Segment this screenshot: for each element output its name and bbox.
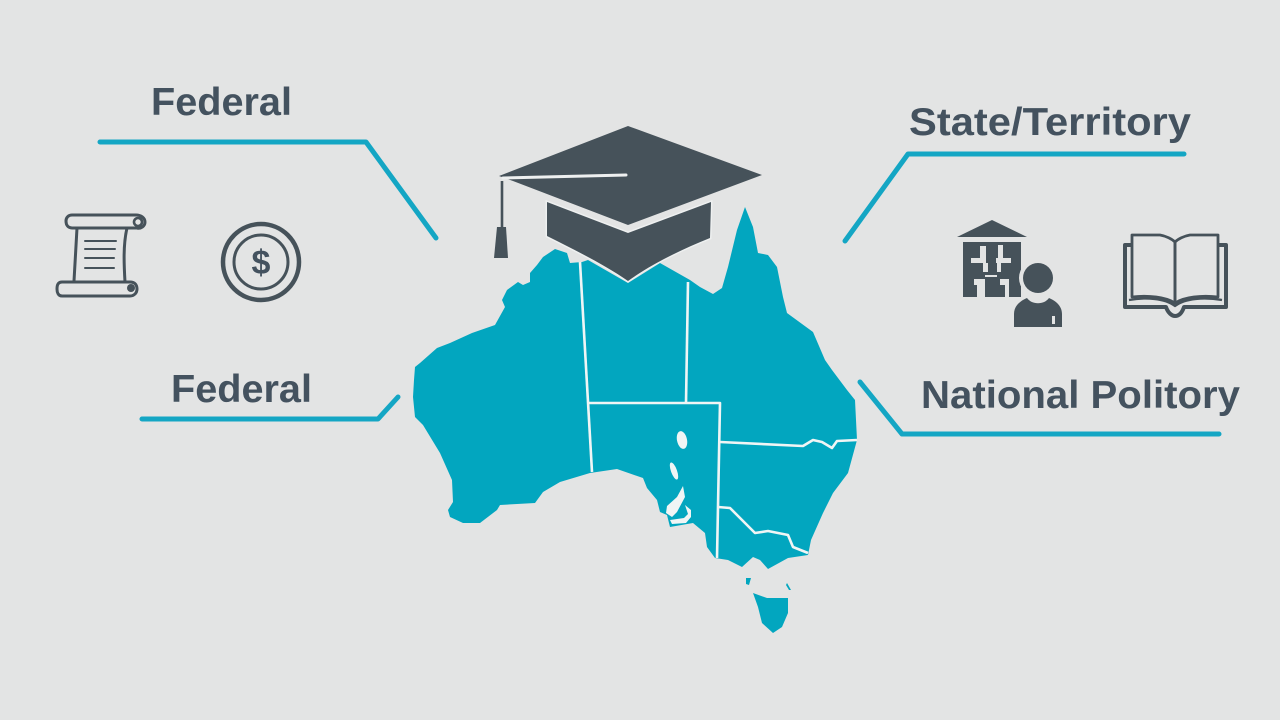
cap highlight cord xyxy=(503,175,626,178)
mortarboard xyxy=(499,126,762,225)
icon: school building with person xyxy=(957,220,1066,333)
Tasmania xyxy=(753,593,788,633)
salt lakes and gulfs xyxy=(666,430,691,524)
connector line: top left xyxy=(100,142,436,238)
connector line: lower left xyxy=(142,397,398,419)
icon: graduation cap xyxy=(494,126,762,281)
cap base xyxy=(547,202,711,281)
Bass Strait islands xyxy=(746,578,791,590)
map of Australia xyxy=(413,207,857,633)
heading: State/Territory: State/Territory xyxy=(909,101,1191,144)
connector line: lower right xyxy=(860,382,1219,434)
heading: Federal (lower left): Federal xyxy=(171,368,312,411)
mainland xyxy=(413,207,857,569)
icon: dollar coin xyxy=(223,224,299,300)
icon: paper scroll xyxy=(57,215,145,296)
heading: Federal (top left): Federal xyxy=(151,81,292,124)
state borders xyxy=(580,262,857,558)
heading: National Politory: National Politory xyxy=(921,374,1240,417)
tassel xyxy=(501,181,503,228)
icon: open book xyxy=(1125,235,1226,316)
icon: dollar coin: $ xyxy=(252,244,271,282)
connector line: top right xyxy=(845,154,1184,241)
